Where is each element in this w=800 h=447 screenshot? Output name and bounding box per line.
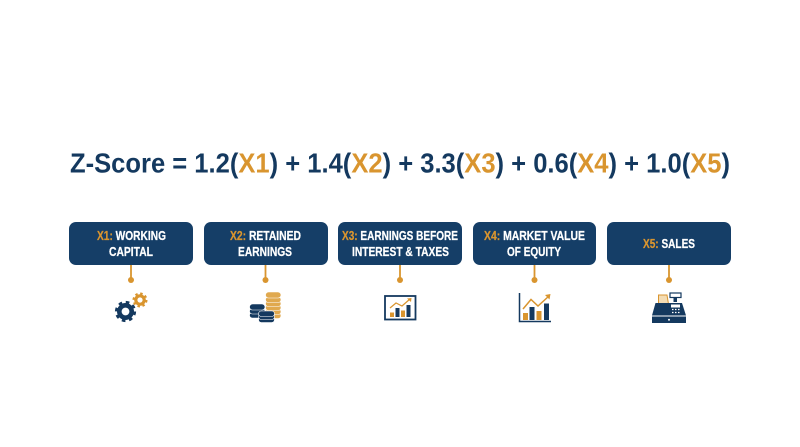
X2 label second line: EARNINGS [238,244,292,259]
X1 label second line: CAPITAL [109,244,153,259]
panel: X3 EBIT [338,222,462,265]
connector: X3 [397,265,403,283]
panel: X4 market value of equity [473,222,596,265]
X2 label: X2: RETAINED [230,228,301,243]
X1 label: X1: WORKING [97,228,166,243]
X3 label second line: INTEREST & TAXES [352,244,449,259]
panel: X2 retained earnings [204,222,328,265]
icon: growth chart [520,293,551,322]
panel: X5 sales [607,222,731,265]
X3 label: X3: EARNINGS BEFORE [342,228,458,243]
icon: gears [116,294,146,321]
X4 label: X4: MARKET VALUE [484,228,585,243]
panel: X1 working capital [69,222,193,265]
connector: X1 [128,265,134,283]
icon: coin stacks [250,292,281,322]
title: Z-Score formula: Z-Score = 1.2(X1) + 1.4(X2) + 3.3(X3) + 0.6(X4) + 1.0(X5) [70,148,730,178]
connector: X4 [532,265,538,283]
X4 label second line: OF EQUITY [507,244,561,259]
connector: X2 [262,265,268,283]
connector: X5 [666,265,672,283]
icon: framed chart [385,296,416,320]
X5 label: X5: SALES [643,236,695,251]
icon: cash register [652,293,686,323]
